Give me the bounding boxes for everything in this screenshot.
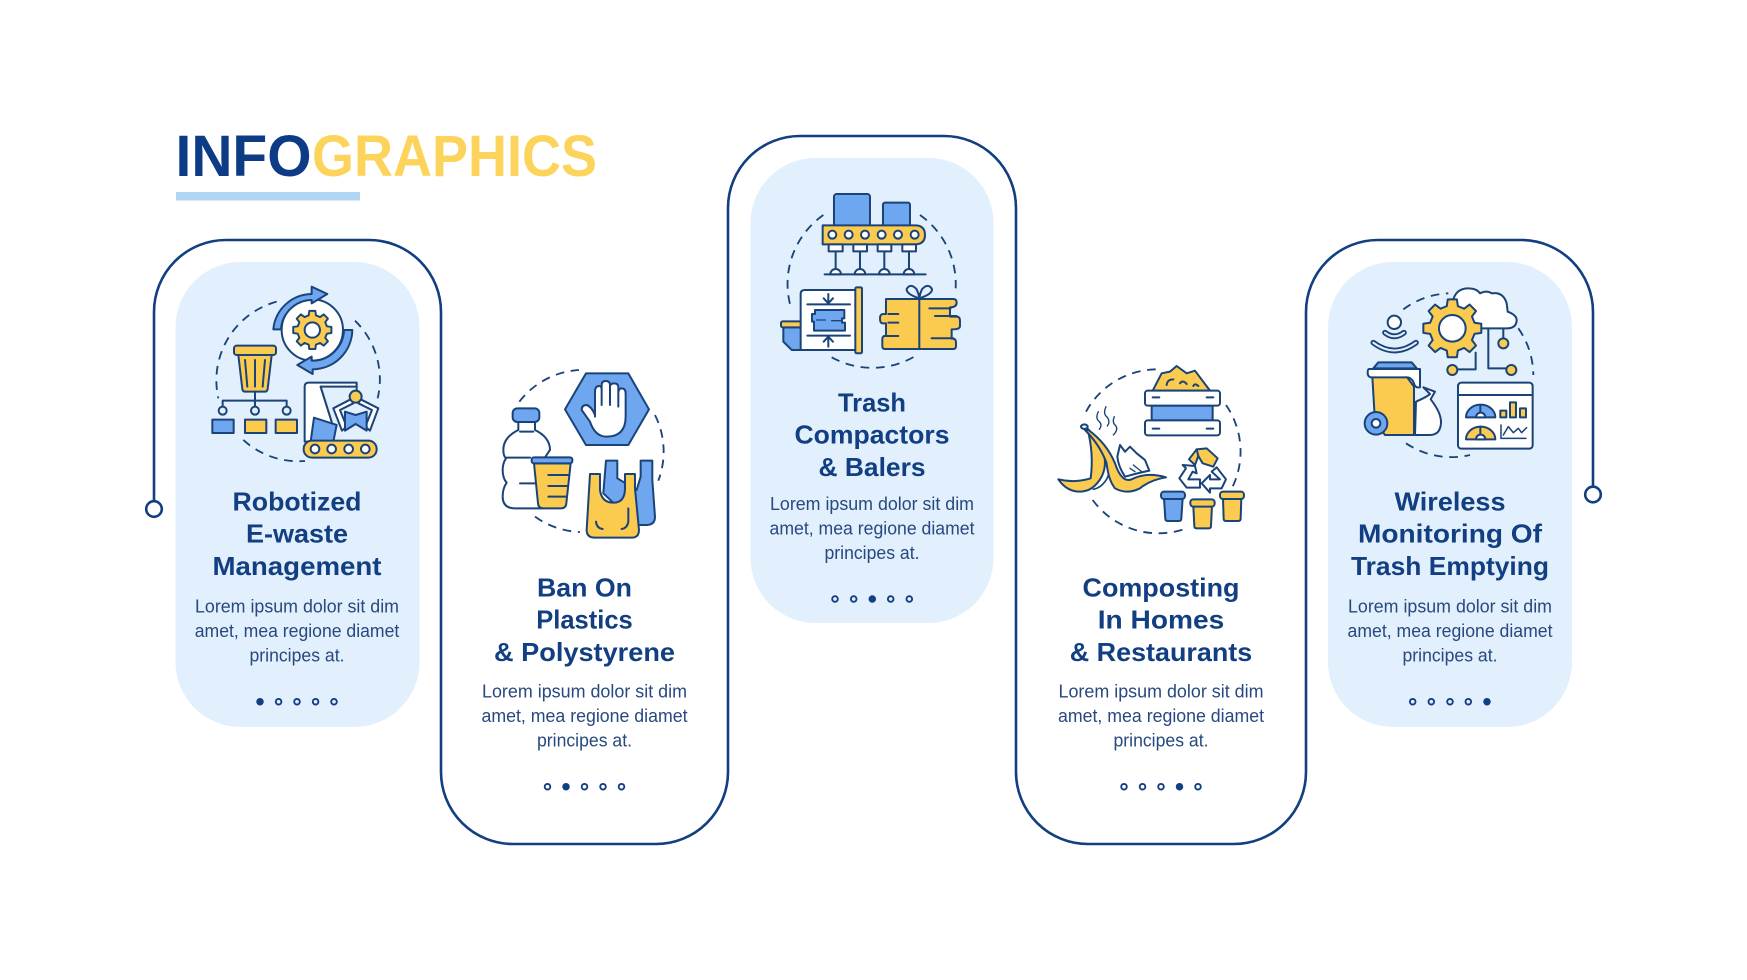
- heading: Management: [212, 551, 382, 581]
- pagination dots: [257, 699, 337, 704]
- body text: Lorem ipsum dolor sit dim: [482, 681, 687, 701]
- heading: Monitoring Of: [1358, 519, 1542, 549]
- pagination dots: [1121, 784, 1201, 790]
- body text: principes at.: [1402, 646, 1498, 666]
- heading: Trash: [838, 388, 906, 418]
- icon: compactor and baler: [781, 194, 960, 368]
- heading: E-waste: [246, 518, 348, 548]
- step 4: Composting In Homes & Restaurants: [1058, 366, 1264, 790]
- body text: Lorem ipsum dolor sit dim: [195, 597, 399, 617]
- body text: [1348, 597, 1552, 666]
- body text: amet, mea regione diamet: [482, 706, 688, 726]
- body text: amet, mea regione diamet: [770, 518, 974, 538]
- heading: & Restaurants: [1070, 637, 1252, 667]
- icon: plastics ban: [503, 370, 664, 538]
- heading: [794, 388, 950, 482]
- body text: [482, 681, 688, 750]
- step 2: Ban On Plastics & Polystyrene: [482, 370, 688, 790]
- pagination dots: [545, 784, 624, 790]
- heading: Trash Emptying: [1351, 551, 1549, 581]
- title: [176, 124, 597, 189]
- heading: Plastics: [536, 605, 633, 635]
- body text: principes at.: [537, 730, 632, 750]
- pagination dots: [1410, 699, 1490, 704]
- body text: [1058, 681, 1264, 750]
- title: GRAPHICS: [312, 124, 597, 189]
- body text: Lorem ipsum dolor sit dim: [1058, 681, 1264, 701]
- step 1: Robotized E-waste Management: [195, 287, 399, 704]
- step 5: Wireless Monitoring Of Trash Emptying: [1348, 288, 1552, 704]
- pagination dots: [832, 596, 912, 602]
- body text: [195, 597, 399, 666]
- title: INFO: [176, 124, 312, 189]
- heading: Ban On: [537, 573, 632, 603]
- icon: wireless bin monitoring: [1365, 288, 1533, 457]
- heading: Wireless: [1394, 487, 1506, 517]
- step 3: Trash Compactors & Balers: [770, 194, 974, 602]
- heading: [1351, 487, 1549, 581]
- icon: recycling robot: [212, 287, 380, 461]
- panel 3 background: [750, 158, 994, 623]
- heading: [494, 573, 675, 667]
- heading: Robotized: [232, 486, 362, 516]
- heading: [212, 486, 382, 581]
- body text: Lorem ipsum dolor sit dim: [1348, 597, 1552, 617]
- body text: principes at.: [824, 543, 920, 563]
- body text: amet, mea regione diamet: [1058, 706, 1264, 726]
- panel 5 background: [1328, 262, 1572, 727]
- heading: & Polystyrene: [494, 637, 675, 667]
- body text: [770, 494, 974, 563]
- body text: Lorem ipsum dolor sit dim: [770, 494, 974, 514]
- heading: In Homes: [1098, 605, 1224, 635]
- body text: amet, mea regione diamet: [1348, 621, 1552, 641]
- panel 1 background: [176, 262, 420, 727]
- body text: amet, mea regione diamet: [195, 621, 399, 641]
- connecting outline: [146, 136, 1601, 844]
- title underline: [176, 192, 360, 200]
- heading: Composting: [1082, 573, 1240, 603]
- icon: composting: [1058, 366, 1244, 533]
- body text: principes at.: [250, 646, 344, 666]
- heading: & Balers: [818, 452, 926, 482]
- heading: [1070, 573, 1252, 667]
- heading: Compactors: [794, 420, 950, 450]
- body text: principes at.: [1114, 730, 1208, 750]
